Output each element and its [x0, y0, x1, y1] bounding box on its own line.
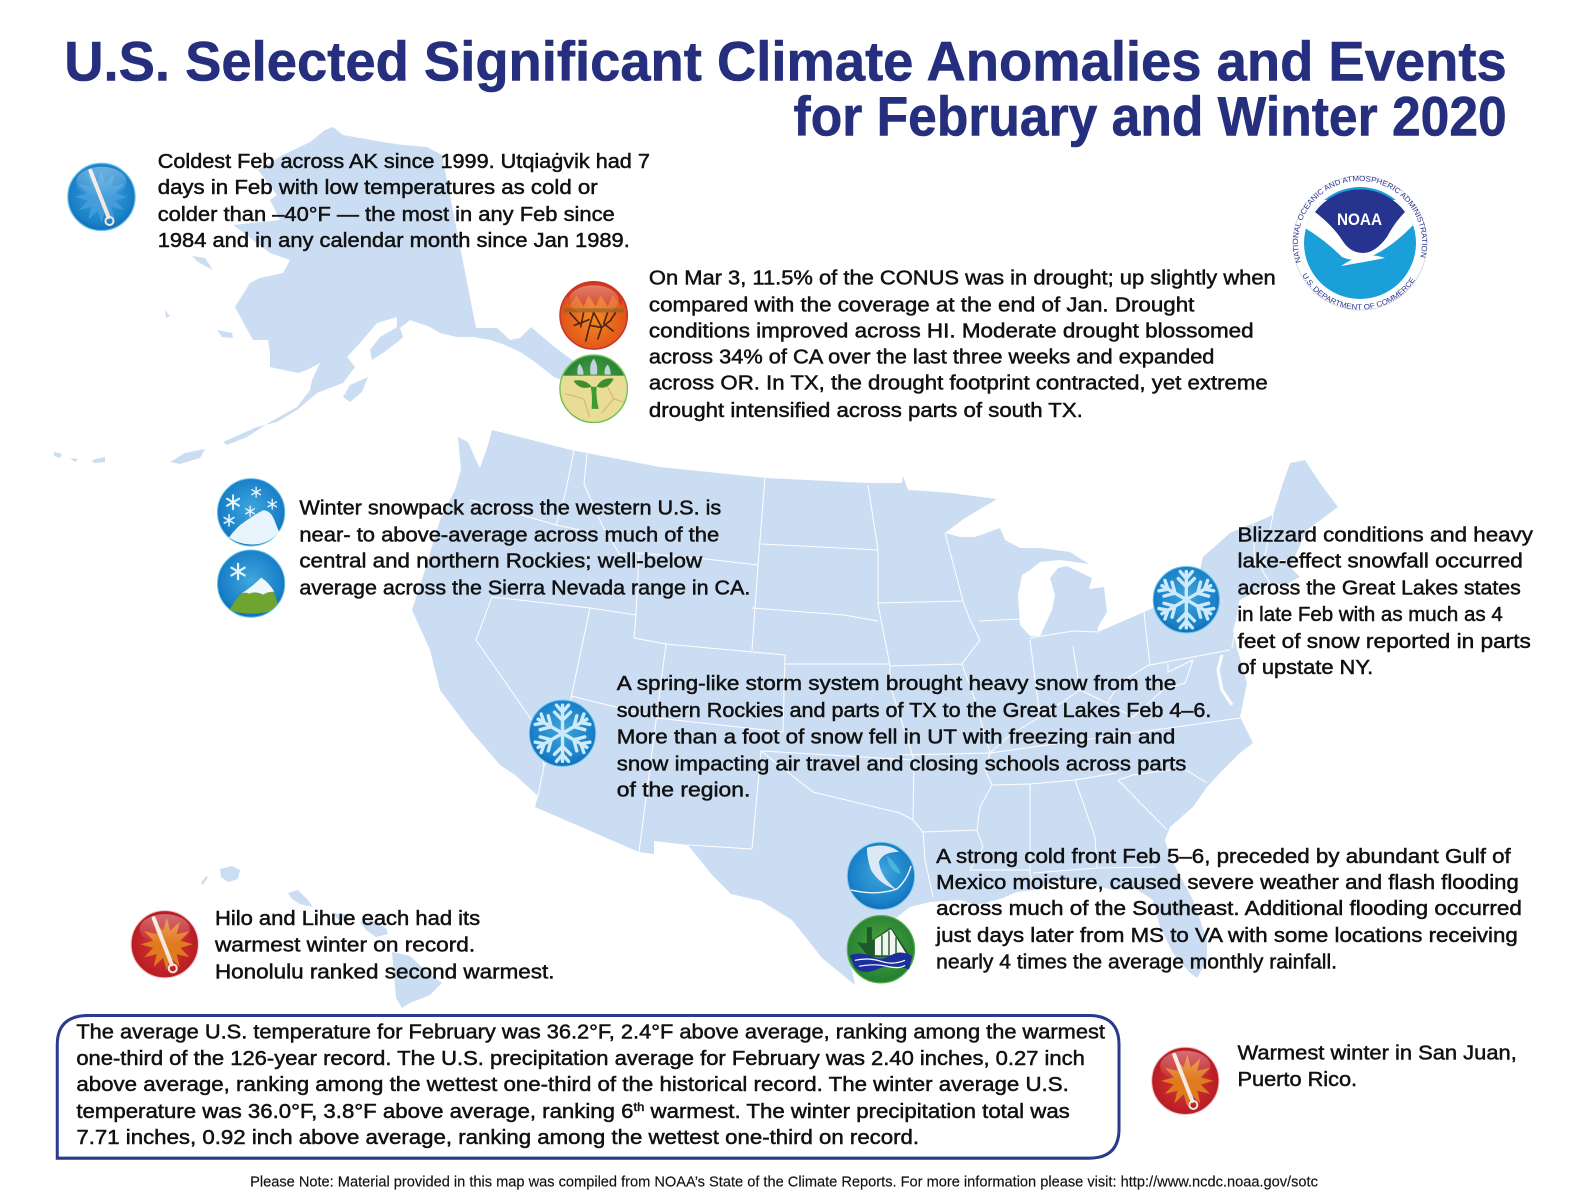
text: Hawaii: Honolulu ranked second warmest.	[215, 960, 554, 983]
text: Puerto Rico: Warmest winter in San Juan,	[1238, 1042, 1517, 1065]
text: Alaska cold: Coldest Feb across AK since 1999. Utqiaġvik had 7	[158, 150, 650, 173]
text: Hawaii: warmest winter on record.	[214, 933, 475, 956]
text: snowpack: Winter snowpack across the western U.S. is	[299, 496, 721, 519]
text: spring-like storm: More than a foot of snow fell in UT with freezing rain and	[617, 725, 1175, 748]
text: spring-like storm: southern Rockies and parts of TX to the Great Lakes Feb 4–6.	[617, 699, 1211, 722]
text: national summary	[76, 1021, 1105, 1149]
map	[54, 127, 1338, 1008]
title	[64, 30, 1507, 148]
text: spring-like storm	[617, 672, 1211, 802]
text: spring-like storm: snow impacting air travel and closing schools across parts	[617, 752, 1186, 775]
text: national summary: 7.71 inches, 0.92 inch above average, ranking among the wettest one-third on record.	[76, 1126, 919, 1149]
text: national summary: temperature was 36.0°F, 3.8°F above average, ranking 6	[76, 1100, 593, 1123]
icon: severe weather	[847, 842, 915, 910]
text: cold front: nearly 4 times the average monthly rainfall.	[936, 950, 1337, 973]
text: blizzard: of upstate NY.	[1238, 656, 1373, 679]
text: spring-like storm: A spring-like storm system brought heavy snow from the	[617, 672, 1176, 695]
text: Puerto Rico	[1238, 1042, 1517, 1091]
text: drought: compared with the coverage at the end of Jan. Drought	[649, 293, 1195, 316]
text: national summary: The average U.S. temperature for February was 36.2°F, 2.4°F above average, ranking among the warmest	[76, 1021, 1105, 1044]
text: national summary: warmest. The winter precipitation total was	[644, 1100, 1070, 1123]
text: drought: across 34% of CA over the last three weeks and expanded	[649, 346, 1214, 369]
text: cold front: Mexico moisture, caused severe weather and flash flooding	[936, 871, 1519, 894]
text: snowpack: near- to above-average across much of the	[299, 523, 719, 546]
title: for February and Winter 2020	[794, 86, 1507, 148]
icon: snow below normal	[217, 550, 285, 617]
text: snowpack: average across the Sierra Nevada range in CA.	[299, 577, 750, 600]
NOAA logo: U.S. DEPARTMENT OF COMMERCE	[1303, 272, 1415, 310]
icon: drought	[560, 281, 627, 349]
text: snowpack	[299, 496, 750, 600]
text: national summary: above average, ranking among the wettest one-third of the historical record. The winter average U.S.	[76, 1073, 1069, 1096]
map: Alaska	[54, 127, 585, 464]
text: national summary: th	[634, 1100, 644, 1114]
icon: cold thermometer	[68, 163, 135, 231]
icon: drought improvement	[560, 355, 628, 426]
text: blizzard: Blizzard conditions and heavy	[1238, 523, 1534, 546]
text: Alaska cold	[158, 150, 650, 252]
text: spring-like storm: of the region.	[617, 779, 750, 802]
text: blizzard: across the Great Lakes states	[1238, 577, 1521, 600]
text: Alaska cold: colder than –40°F — the most in any Feb since	[158, 203, 615, 226]
text: cold front: A strong cold front Feb 5–6, preceded by abundant Gulf of	[936, 845, 1511, 868]
text: drought: On Mar 3, 11.5% of the CONUS was in drought; up slightly when	[649, 266, 1276, 289]
text: drought: drought intensified across parts of south TX.	[649, 399, 1083, 422]
text: blizzard: in late Feb with as much as 4	[1238, 603, 1503, 626]
icon: warm thermometer Hawaii	[131, 911, 198, 978]
icon: snow above normal	[217, 479, 285, 546]
map: Hawaii	[201, 866, 442, 1008]
text: cold front: just days later from MS to VA with some locations receiving	[935, 924, 1518, 947]
text: blizzard	[1238, 523, 1534, 679]
map: state boundaries	[470, 450, 1285, 897]
text: national summary: one-third of the 126-year record. The U.S. precipitation average for February was 2.40 inches, 0.27 inch	[76, 1047, 1085, 1070]
NOAA logo: NOAA	[1337, 210, 1382, 229]
icon: snowflake storm	[529, 700, 596, 766]
footnote: Please Note: Material provided in this map was compiled from NOAA’s State of the Climate Reports. For more information please visit: http://www.ncdc.noaa.gov/sotc	[250, 1173, 1318, 1190]
text: blizzard: lake-effect snowfall occurred	[1238, 550, 1523, 573]
text: Puerto Rico: Puerto Rico.	[1238, 1068, 1357, 1091]
map: Chesapeake Bay	[1218, 655, 1232, 705]
icon: flood	[847, 916, 915, 983]
text: blizzard: feet of snow reported in parts	[1238, 630, 1531, 653]
icon: snowflake blizzard	[1153, 567, 1219, 633]
text: drought: conditions improved across HI. Moderate drought blossomed	[649, 320, 1254, 343]
NOAA logo	[1292, 176, 1428, 310]
text: cold front	[935, 845, 1522, 973]
panel: national summary	[57, 1016, 1119, 1158]
map: contiguous United States	[412, 430, 1338, 985]
text: snowpack: central and northern Rockies; well-below	[299, 550, 702, 573]
text: Alaska cold: days in Feb with low temperatures as cold or	[158, 176, 598, 199]
icon: warm thermometer Puerto Rico	[1152, 1047, 1219, 1114]
text: cold front: across much of the Southeast. Additional flooding occurred	[936, 897, 1522, 920]
NOAA logo: NATIONAL OCEANIC AND ATMOSPHERIC ADMINISTRATION	[1292, 176, 1428, 263]
title: U.S. Selected Significant Climate Anomalies and Events	[64, 30, 1507, 92]
text: Alaska cold: 1984 and in any calendar month since Jan 1989.	[158, 229, 630, 252]
text: drought	[649, 266, 1276, 422]
text: Hawaii: Hilo and Lihue each had its	[215, 907, 480, 930]
text: Hawaii	[214, 907, 554, 983]
text: drought: across OR. In TX, the drought footprint contracted, yet extreme	[649, 372, 1268, 395]
